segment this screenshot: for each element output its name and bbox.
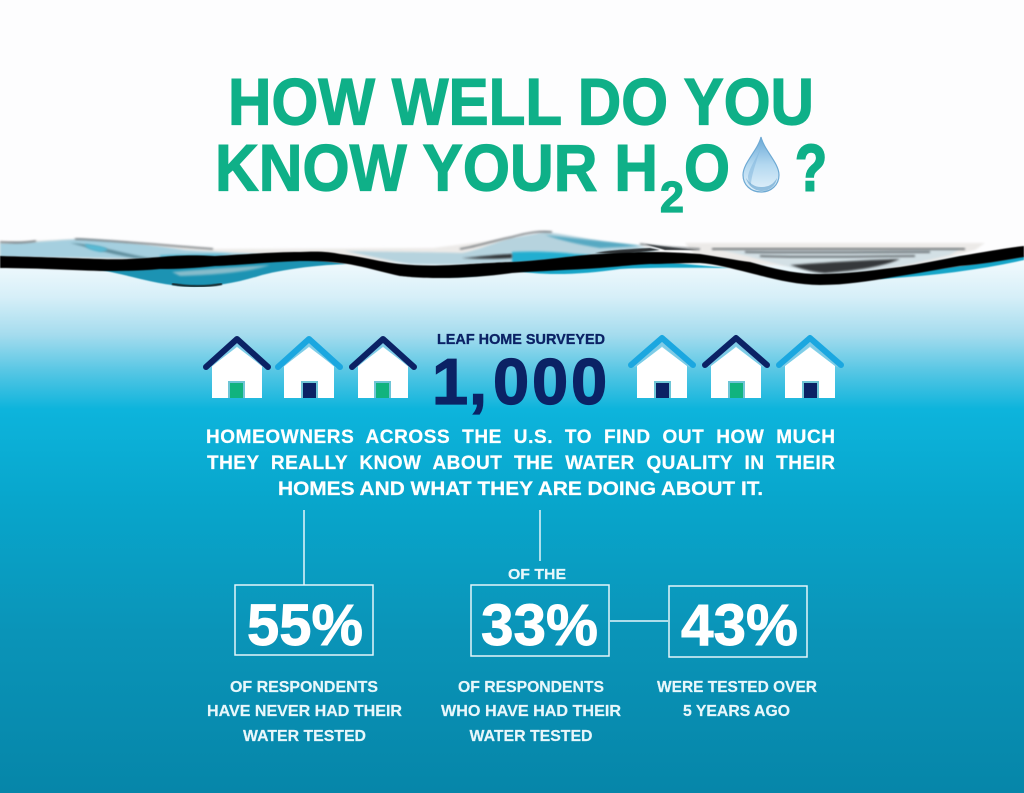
caption: 43%: WERE TESTED OVER (657, 679, 817, 696)
intro text block: HOMES AND WHAT THEY ARE DOING ABOUT IT. (278, 479, 763, 500)
survey heading: LEAF HOME SURVEYED (437, 332, 605, 348)
intro text block (206, 427, 835, 500)
label: of the: OF THE (508, 566, 566, 583)
icon: house 1 (206, 339, 268, 398)
wave: right edge highlight (880, 256, 1024, 279)
caption: 55%: OF RESPONDENTS (230, 679, 378, 696)
wave: dark streaks right (712, 249, 965, 257)
caption: 55%: WATER TESTED (243, 728, 366, 745)
title: O (684, 130, 730, 204)
wave: black waterline (0, 246, 1024, 285)
caption: 55%: HAVE NEVER HAD THEIR (207, 703, 402, 720)
icon: house 6 (779, 338, 841, 398)
wave: pale grey surface band (0, 238, 985, 270)
connector line to 33% (539, 510, 541, 561)
connector line 33% to 43% (610, 620, 668, 622)
title: ? (795, 130, 827, 204)
wave: dark wedge right (790, 259, 900, 273)
caption: 33%: WHO HAVE HAD THEIR (441, 703, 621, 720)
wave: swirl cyan (85, 244, 232, 259)
wave: dark streak centre (595, 244, 700, 253)
survey number: 1,000 (432, 345, 607, 418)
icon: house 5 (705, 338, 767, 398)
wave: pale swirl right (720, 249, 960, 276)
background: sky (0, 0, 1024, 260)
icon: house 3 (352, 339, 414, 398)
caption: 43% (657, 679, 817, 720)
wave: cyan underside centre (400, 260, 730, 277)
wave: swirl left (70, 243, 155, 259)
title: 2 (660, 173, 684, 222)
caption: 33%: WATER TESTED (470, 728, 592, 745)
icon: water drop (743, 137, 779, 192)
intro text block: HOMEOWNERS ACROSS THE U.S. TO FIND OUT HOW MUCH (206, 427, 835, 448)
wave: teal underside (100, 258, 347, 287)
connector line to 55% (303, 510, 305, 585)
caption: 33%: OF RESPONDENTS (458, 679, 604, 696)
wave: underside dark rim (172, 284, 222, 286)
title: KNOW YOUR H (215, 130, 658, 204)
icon: house 4 (631, 338, 693, 398)
title (215, 64, 827, 222)
wave: pale blue body left (0, 239, 262, 259)
caption: 55% (207, 679, 402, 745)
wave: dark crest strokes (0, 232, 700, 249)
caption: 33% (441, 679, 621, 745)
intro text block: THEY REALLY KNOW ABOUT THE WATER QUALITY IN THEIR (207, 453, 835, 474)
icon: house 2 (278, 339, 340, 398)
stat: 33%: 33% (481, 593, 598, 658)
stat: 43%: 43% (681, 593, 798, 658)
title: HOW WELL DO YOU (228, 64, 814, 138)
wave: pale underside highlight (172, 265, 270, 276)
wave: dark streak far left (462, 254, 512, 259)
background: water (0, 255, 1024, 793)
caption: 43%: 5 YEARS AGO (683, 703, 790, 720)
wave: teal patch (545, 235, 645, 248)
wave: pale blue body centre right (345, 232, 660, 265)
stat: 55%: 55% (247, 593, 363, 658)
water surface wave (0, 232, 1024, 287)
wave: cyan highlight centre (512, 252, 592, 263)
